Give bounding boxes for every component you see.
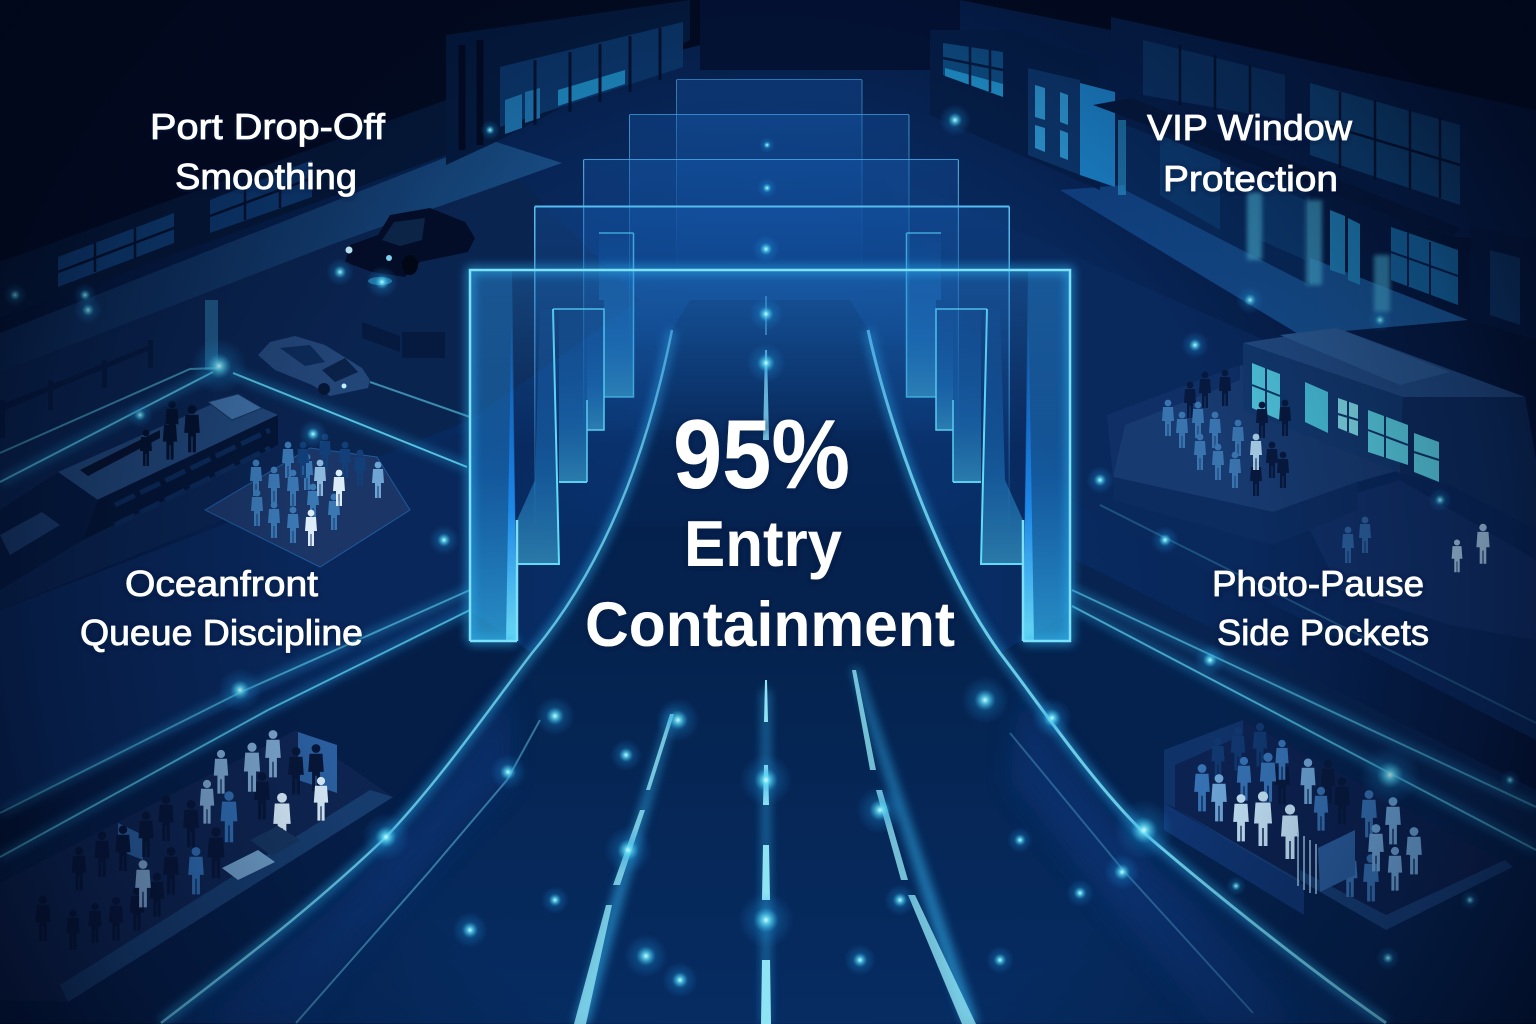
label: VIP window protection: Protection: [1163, 158, 1338, 199]
gate 3: [583, 160, 959, 430]
central stat: 95% entry containment: 95%: [673, 399, 850, 509]
label: oceanfront queue discipline: Oceanfront: [125, 563, 318, 604]
label: photo-pause side pockets: Photo-Pause: [1212, 563, 1424, 604]
central stat: 95% entry containment: Containment: [585, 590, 955, 660]
label: port drop-off smoothing: [150, 106, 386, 197]
car: blue sedan: [258, 336, 370, 396]
light post: [205, 300, 218, 370]
crowd plaza: bottom right: [1164, 720, 1513, 930]
gate stacked feet left: [517, 233, 634, 564]
top dark sky areas: [0, 0, 1536, 270]
rooftop terminal: [0, 394, 278, 590]
car: dark sedan: [345, 208, 475, 285]
central stat: 95% entry containment: Entry: [684, 507, 842, 580]
label: photo-pause side pockets: Side Pockets: [1217, 612, 1429, 653]
crowd plaza: bottom left: [0, 730, 393, 1002]
buildings top right: [930, 17, 1536, 340]
crowd plaza: oceanfront queue: [205, 434, 410, 567]
gate 5 (farthest): [676, 80, 862, 270]
gate 4: [629, 114, 910, 345]
gate stacked feet right: [906, 233, 1023, 564]
label: VIP window protection: [1147, 107, 1353, 199]
label: oceanfront queue discipline: [80, 563, 363, 653]
gate 1 (front): [470, 270, 1070, 641]
buildings top left: [0, 0, 690, 318]
label: VIP window protection: VIP Window: [1147, 107, 1353, 148]
lane markings: [574, 296, 978, 1024]
central stat: 95% entry containment: [585, 399, 955, 660]
label: photo-pause side pockets: [1212, 563, 1429, 653]
label: port drop-off smoothing: Port Drop-Off: [150, 106, 386, 147]
left bollards and gate: [0, 322, 445, 438]
photo-pause plaza and building: [1107, 328, 1536, 640]
label: port drop-off smoothing: Smoothing: [175, 156, 357, 197]
gate 2: [534, 206, 1010, 527]
side road light lines: [0, 368, 1536, 857]
main road: [161, 300, 1386, 1024]
label: oceanfront queue discipline: Queue Discipline: [80, 612, 363, 653]
